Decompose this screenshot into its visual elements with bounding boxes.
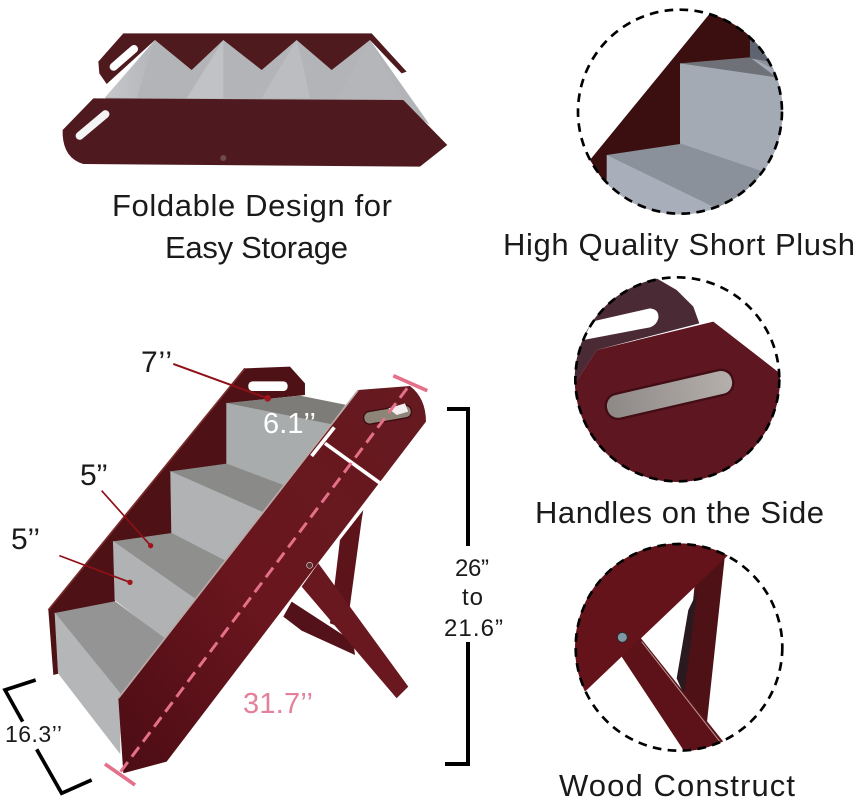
caption: handles: Handles on the Side: [535, 495, 824, 530]
folded grey steps: [105, 40, 430, 125]
detail circle: handles: [574, 276, 781, 483]
dashed outline: [575, 277, 779, 481]
step height labels: 5’’: [11, 523, 40, 556]
width bracket: [5, 680, 92, 793]
height label: [444, 555, 503, 642]
width label: 16.3’’: [5, 721, 62, 747]
carpeted steps: [55, 396, 345, 753]
dashed outline: [576, 544, 782, 751]
height label: 26”: [455, 555, 489, 582]
caption: short plush: High Quality Short Plush: [503, 227, 855, 262]
wood frame detail: [575, 543, 728, 751]
height bracket: [445, 409, 468, 764]
dashed outline: [578, 10, 782, 214]
handle detail: [574, 278, 780, 482]
illustration: folded stairs: [63, 33, 447, 167]
folded front panel with handle: [63, 98, 447, 167]
detail circle: wood construction: [574, 542, 784, 752]
illustration: stairs with dimensions: [5, 364, 427, 793]
carpet and wood detail: [590, 14, 783, 214]
back panel with handle: [48, 367, 305, 675]
bolt: [617, 632, 627, 642]
detail circle: short plush: [576, 8, 784, 215]
caption: foldable design: [112, 188, 392, 265]
front side panel with handle: [118, 386, 426, 773]
caption: foldable design: Foldable Design for: [112, 188, 392, 223]
length label: 31.7’’: [243, 688, 313, 720]
pink length line: [105, 376, 427, 785]
white tread depth marks: [312, 427, 383, 485]
step height labels: 7’’: [141, 346, 172, 379]
folded back panel with handle: [98, 33, 407, 84]
caption: foldable design: Easy Storage: [165, 230, 348, 265]
height label: to: [462, 584, 483, 611]
tread depth label: 6.1’’: [263, 408, 316, 440]
step callout lines: [59, 364, 271, 585]
height label: 21.6”: [444, 615, 503, 642]
step height labels: [11, 346, 172, 556]
step height labels: 5’’: [80, 459, 108, 492]
caption: wood construct: Wood Construct: [559, 768, 795, 803]
legs: [283, 510, 408, 698]
